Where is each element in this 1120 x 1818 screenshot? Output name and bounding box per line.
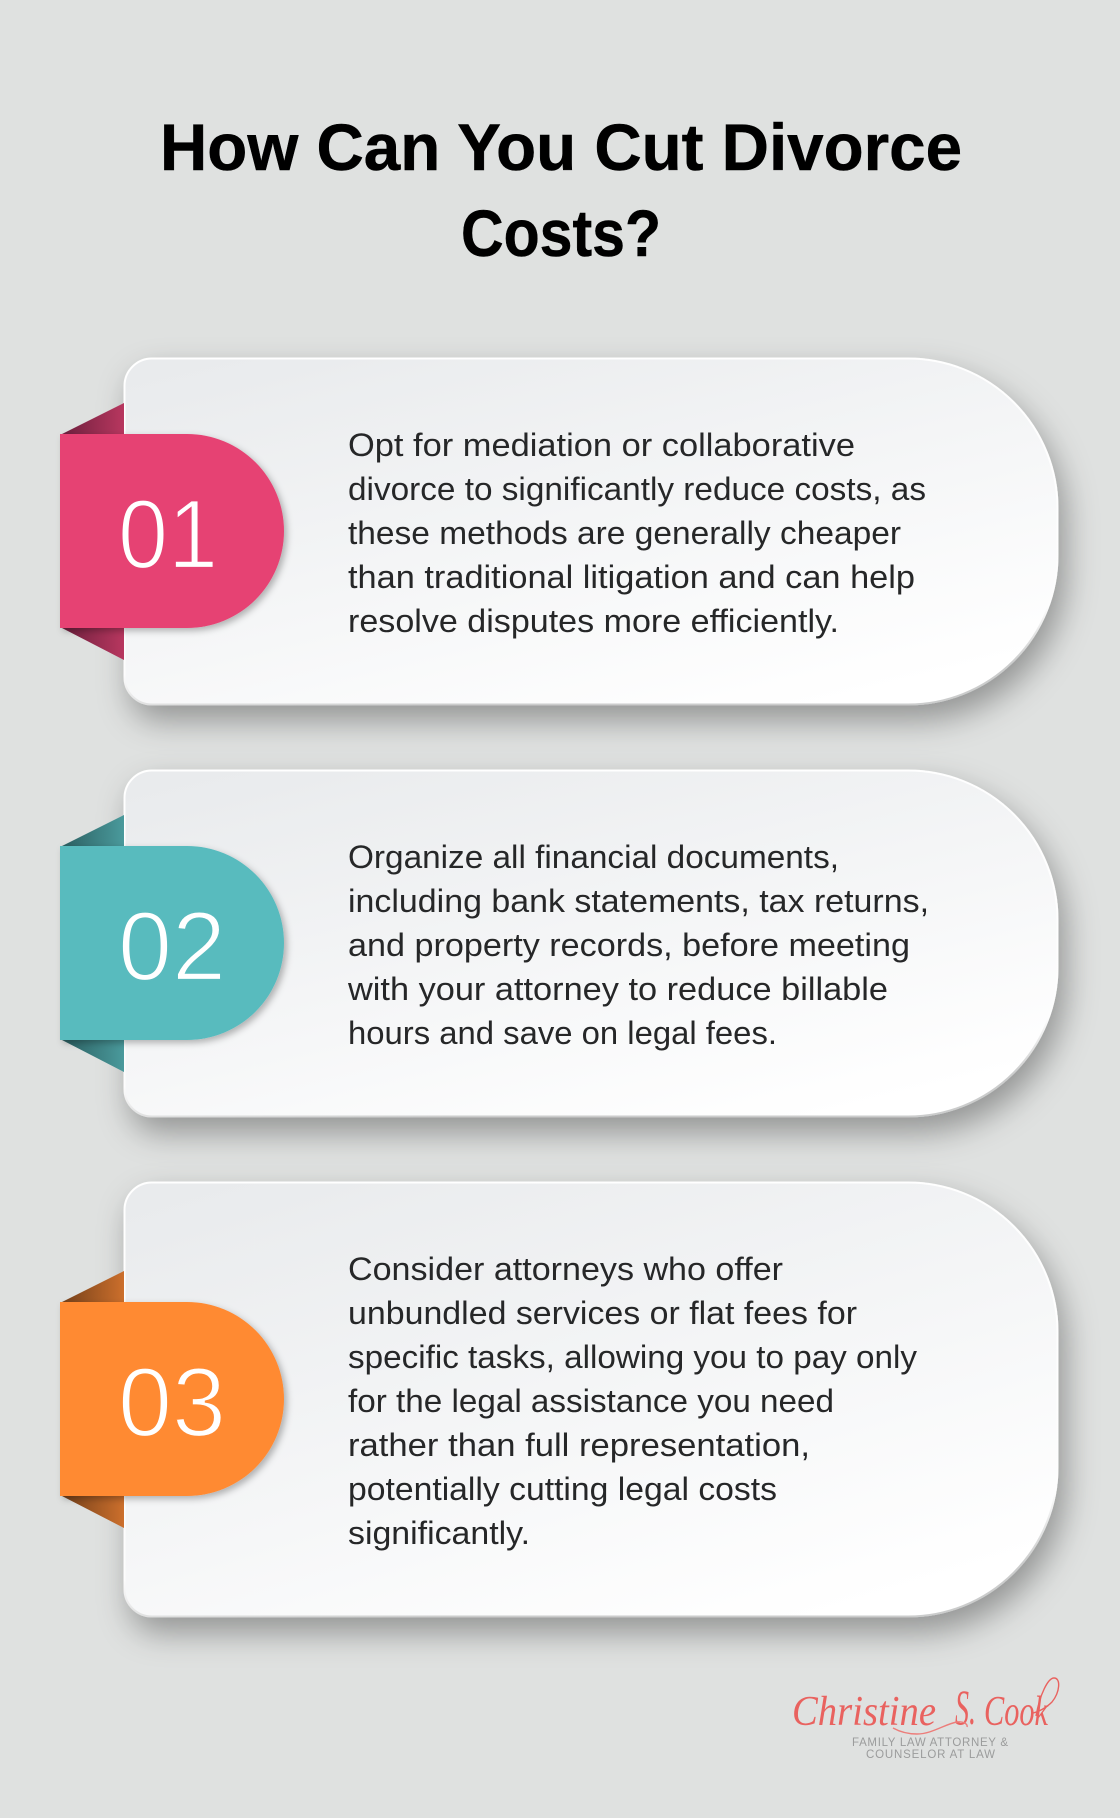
step 3 text: unbundled services or flat fees for <box>348 1295 857 1331</box>
logo: Christine S. Cook: FAMILY LAW ATTORNEY & <box>852 1737 1008 1749</box>
ribbon folds 3 <box>62 1271 124 1528</box>
title: How Can You Cut Divorce <box>160 110 962 184</box>
card 2 background <box>124 770 1058 1116</box>
step 1 text: Opt for mediation or collaborative <box>348 427 855 463</box>
logo: Christine S. Cook: S. <box>955 1679 976 1735</box>
logo: Christine S. Cook: Cook <box>984 1689 1049 1735</box>
logo: Christine S. Cook: Christine <box>792 1689 936 1735</box>
step 2 text: with your attorney to reduce billable <box>347 971 888 1007</box>
step 1 text: resolve disputes more efficiently. <box>348 603 839 639</box>
step 2 text: hours and save on legal fees. <box>348 1015 777 1051</box>
title <box>160 110 962 270</box>
step 3 text <box>348 1251 918 1551</box>
number 03: 03 <box>118 1347 226 1457</box>
badge 2 <box>60 846 284 1040</box>
step 3 text: Consider attorneys who offer <box>348 1251 783 1287</box>
panel: step 2 <box>60 770 1058 1116</box>
step 2 text <box>347 839 929 1051</box>
title: Costs? <box>461 196 661 270</box>
logo: Christine S. Cook: COUNSELOR AT LAW <box>866 1749 995 1761</box>
number 01: 01 <box>118 479 218 589</box>
step 3 text: specific tasks, allowing you to pay only <box>348 1339 918 1375</box>
step 2 text: including bank statements, tax returns, <box>348 883 929 919</box>
step 1 text <box>348 427 926 639</box>
step 3 text: significantly. <box>348 1515 530 1551</box>
badge 1 <box>60 434 284 628</box>
logo: Christine S. Cook <box>792 1678 1059 1761</box>
panel: step 3 <box>60 1182 1058 1616</box>
card 1 background <box>124 358 1058 704</box>
ribbon folds 1 <box>62 403 124 660</box>
badge 3 <box>60 1302 284 1496</box>
step 1 text: these methods are generally cheaper <box>348 515 901 551</box>
ribbon folds 2 <box>62 815 124 1072</box>
step 3 text: potentially cutting legal costs <box>348 1471 777 1507</box>
step 1 text: than traditional litigation and can help <box>348 559 915 595</box>
step 2 text: Organize all financial documents, <box>348 839 839 875</box>
number 02: 02 <box>118 891 226 1001</box>
step 2 text: and property records, before meeting <box>348 927 910 963</box>
step 1 text: divorce to significantly reduce costs, as <box>348 471 926 507</box>
card 3 background <box>124 1182 1058 1616</box>
step 3 text: for the legal assistance you need <box>348 1383 834 1419</box>
panel: step 1 <box>60 358 1058 704</box>
step 3 text: rather than full representation, <box>348 1427 810 1463</box>
